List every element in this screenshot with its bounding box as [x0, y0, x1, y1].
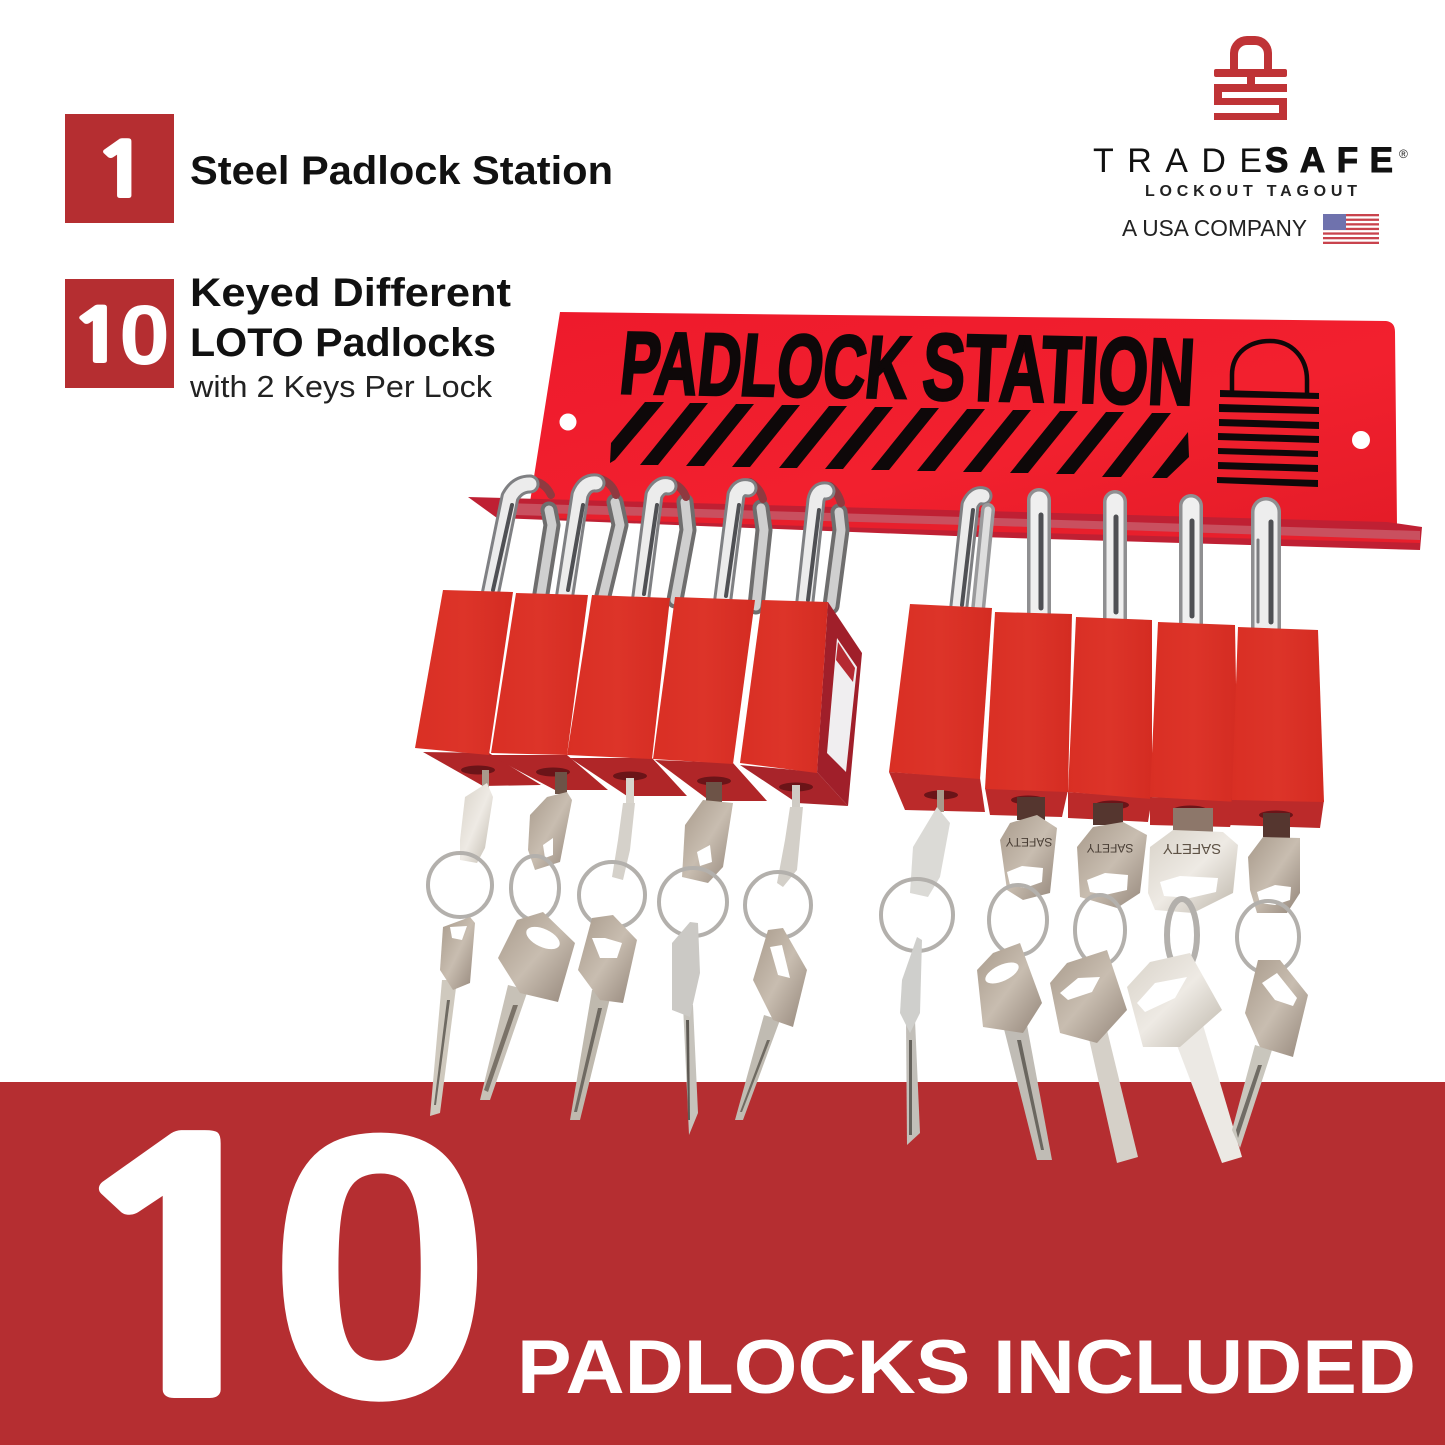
- big number 10: 1: [47, 1106, 316, 1445]
- key set 6: [881, 790, 953, 1145]
- shackle eng rims: [530, 478, 841, 503]
- lock 3: [567, 595, 687, 796]
- logo subtitle: LOCKOUT TAGOUT: [1145, 183, 1357, 200]
- lock 7: [985, 612, 1072, 817]
- feature 2: 0: [119, 288, 170, 382]
- usa company: A USA COMPANY: [1122, 215, 1307, 241]
- padlocks included caption: PADLOCKS INCLUDED: [517, 1325, 1416, 1410]
- sign text: PADLOCK: [616, 313, 914, 417]
- key engraving: SAFETY: [1163, 840, 1221, 857]
- wordmark: TRADE: [1093, 142, 1262, 180]
- sign padlock icon: [1217, 341, 1319, 487]
- lock 1: [415, 590, 541, 786]
- key engraving: SAFETY: [1006, 835, 1052, 849]
- key set 1: [428, 770, 493, 1116]
- lock 5: [740, 600, 862, 806]
- padlock station sign plate: [530, 312, 1397, 526]
- key set 10: [1232, 813, 1308, 1148]
- key set 5: [735, 785, 811, 1120]
- key set 3: [570, 778, 645, 1120]
- feature 1: 1: [92, 134, 152, 208]
- feature 2: with 2 Keys Per Lock: [189, 369, 493, 404]
- shackle backs: [540, 502, 841, 606]
- key set 7: [977, 797, 1057, 1160]
- shackle fronts: [489, 483, 983, 615]
- feature 1: [65, 114, 613, 223]
- key set 4: [659, 782, 733, 1135]
- tradesafe logo: [1093, 36, 1408, 244]
- icon: logo padlock: [1214, 36, 1287, 120]
- lock 8: [1068, 617, 1152, 822]
- feature 2: Keyed Different: [190, 271, 511, 315]
- icon: us flag: [1323, 214, 1379, 244]
- sign text: STATION: [920, 314, 1198, 425]
- feature 2: [65, 271, 511, 404]
- hazard stripes: [610, 402, 1189, 478]
- big number 10: [47, 1054, 494, 1445]
- hanger rail: [468, 497, 1422, 550]
- bottom red band: [0, 1082, 1445, 1445]
- padlock bodies: [415, 590, 1324, 828]
- lock 10: [1228, 627, 1324, 828]
- straight shackles: [1039, 500, 1191, 628]
- key set 8: [1050, 803, 1147, 1163]
- feature 2: 1: [69, 300, 127, 373]
- feature 2: LOTO Padlocks: [190, 321, 496, 365]
- lock 4: [653, 597, 767, 801]
- key engraving: SAFETY: [1087, 841, 1133, 855]
- tradesafe logo: ®: [1399, 147, 1408, 161]
- padlock shackles: [489, 478, 1271, 635]
- feature 1: Steel Padlock Station: [190, 149, 613, 193]
- tradesafe logo: SAFE: [1265, 141, 1393, 180]
- key set 9: [1127, 808, 1242, 1163]
- lock 2: [489, 593, 608, 790]
- key set 2: [480, 772, 575, 1100]
- mounting holes: [560, 414, 576, 430]
- lock 6 back leg: [978, 510, 988, 610]
- lock 10 shackle: [1251, 512, 1281, 635]
- lock 6: [889, 604, 992, 812]
- key sets: [428, 770, 1308, 1163]
- lock 9: [1150, 622, 1238, 827]
